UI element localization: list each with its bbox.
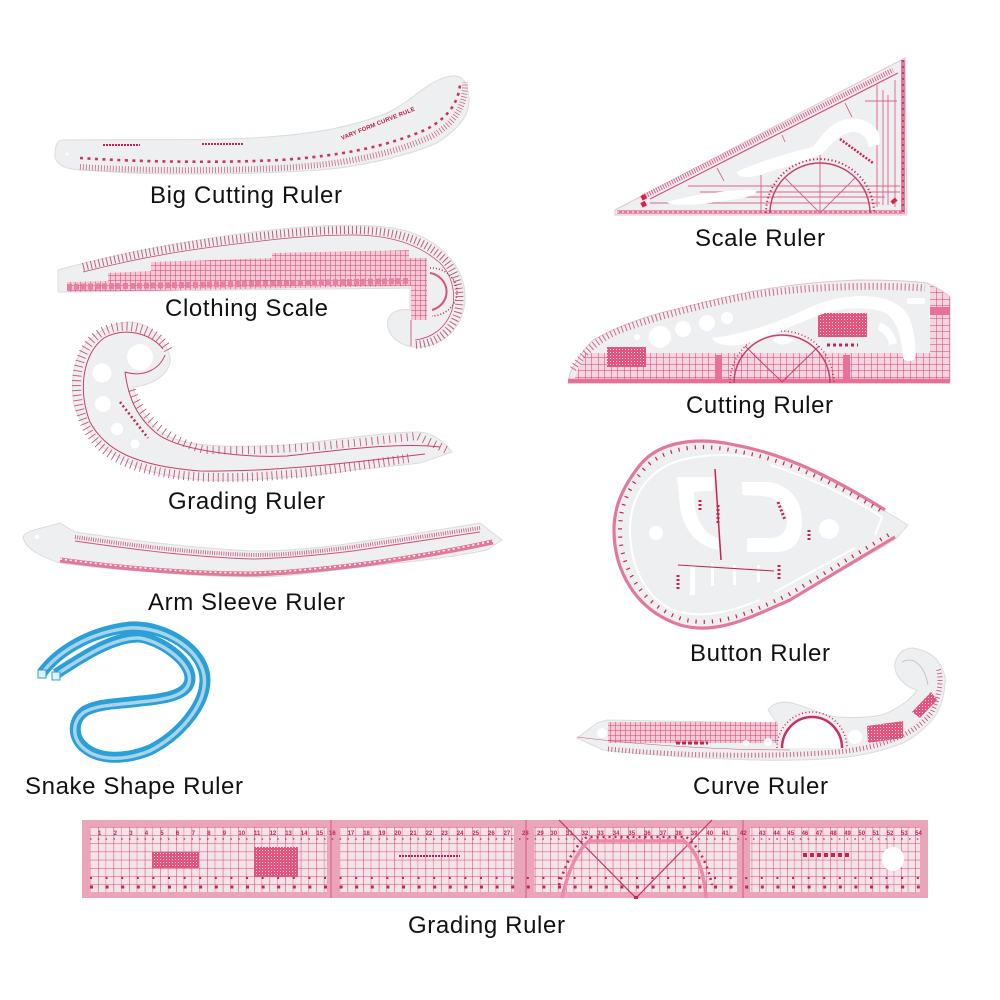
semicircular cut-out bbox=[782, 717, 842, 748]
scale numbers: 44 bbox=[773, 831, 781, 837]
pink blocks bbox=[867, 721, 903, 743]
ruler: big cutting ruler bbox=[55, 76, 469, 174]
label: Curve Ruler: Curve Ruler bbox=[693, 773, 828, 800]
scale numbers: 46 bbox=[802, 831, 809, 837]
ruler: cutting ruler bbox=[568, 280, 950, 383]
scale numbers: 42 bbox=[740, 831, 747, 837]
scale numbers: 49 bbox=[844, 831, 852, 837]
scale numbers: 24 bbox=[457, 831, 464, 837]
scale numbers: 21 bbox=[410, 831, 417, 837]
scale numbers: 10 bbox=[238, 831, 246, 837]
scale numbers: 37 bbox=[660, 831, 667, 837]
scale numbers: 33 bbox=[597, 831, 605, 837]
scale numbers: 6 bbox=[176, 831, 180, 837]
label: Grading Ruler straight: Grading Ruler bbox=[408, 912, 565, 939]
scale numbers: 3 bbox=[129, 831, 133, 837]
label: Clothing Scale: Clothing Scale bbox=[165, 295, 328, 322]
scale numbers: 15 bbox=[316, 831, 324, 837]
scale numbers: 16 bbox=[329, 831, 336, 837]
scale numbers: 7 bbox=[192, 831, 196, 837]
scale numbers: 31 bbox=[566, 831, 573, 837]
scale numbers: 47 bbox=[816, 831, 823, 837]
scale numbers: 40 bbox=[706, 831, 714, 837]
pink blocks and labels bbox=[152, 852, 199, 868]
scale numbers: 2 bbox=[114, 831, 118, 837]
ruler: clothing scale bbox=[58, 225, 465, 347]
scale numbers: 9 bbox=[223, 831, 227, 837]
scale numbers: 11 bbox=[254, 831, 261, 837]
scale numbers: 28 bbox=[522, 831, 529, 837]
pink grid bbox=[608, 722, 778, 743]
label: Scale Ruler: Scale Ruler bbox=[695, 225, 825, 252]
scale numbers: 45 bbox=[787, 831, 795, 837]
scale numbers: 5 bbox=[160, 831, 164, 837]
scale numbers: 52 bbox=[887, 831, 894, 837]
scale numbers: 14 bbox=[301, 831, 308, 837]
ruler: grading ruler curved bbox=[72, 322, 452, 480]
scale numbers: 20 bbox=[394, 831, 402, 837]
scale numbers: 35 bbox=[628, 831, 636, 837]
scale numbers: 25 bbox=[472, 831, 480, 837]
scale numbers: 27 bbox=[504, 831, 511, 837]
scale numbers: 50 bbox=[858, 831, 866, 837]
scale numbers: 23 bbox=[441, 831, 449, 837]
scale numbers: 29 bbox=[537, 831, 544, 837]
cut-out slots bbox=[737, 118, 880, 177]
scale numbers: 39 bbox=[691, 831, 698, 837]
label: Snake Shape Ruler: Snake Shape Ruler bbox=[25, 773, 243, 800]
scale numbers: 22 bbox=[426, 831, 433, 837]
scale numbers: 13 bbox=[285, 831, 293, 837]
ruler: curve ruler bbox=[577, 648, 945, 760]
pink blocks bbox=[818, 313, 867, 337]
scale numbers: 53 bbox=[901, 831, 908, 837]
label: Grading Ruler curved: Grading Ruler bbox=[168, 488, 325, 515]
ruler: arm sleeve ruler bbox=[23, 523, 502, 577]
label: Big Cutting Ruler: Big Cutting Ruler bbox=[150, 182, 342, 209]
scale numbers: 54 bbox=[915, 831, 923, 837]
label: Button Ruler: Button Ruler bbox=[690, 640, 830, 667]
cut-out slots and holes bbox=[712, 296, 915, 361]
scale numbers: 26 bbox=[488, 831, 495, 837]
scale numbers: 34 bbox=[613, 831, 620, 837]
hanging hole bbox=[882, 847, 904, 871]
protractor arc bbox=[559, 820, 712, 898]
scale numbers: 38 bbox=[675, 831, 683, 837]
scale numbers: 19 bbox=[379, 831, 386, 837]
ruler: big cutting ruler: VARY FORM CURVE RULE bbox=[341, 107, 416, 142]
scale numbers: 18 bbox=[363, 831, 371, 837]
scale numbers: 43 bbox=[759, 831, 766, 837]
ruler: flexible blue snake ruler bbox=[38, 627, 205, 758]
scale numbers: 30 bbox=[550, 831, 558, 837]
D-shaped cut-outs bbox=[677, 477, 719, 550]
scale numbers: 12 bbox=[270, 831, 277, 837]
scale numbers: 51 bbox=[873, 831, 880, 837]
grid band bbox=[574, 284, 950, 383]
scale numbers: 32 bbox=[582, 831, 589, 837]
punched holes bbox=[92, 344, 153, 448]
scale numbers: 36 bbox=[644, 831, 651, 837]
white inner slots bbox=[630, 455, 882, 614]
ruler: triangular scale ruler bbox=[615, 58, 907, 215]
scale numbers: 1 bbox=[98, 831, 102, 837]
scale numbers: 8 bbox=[207, 831, 211, 837]
scale numbers: 41 bbox=[722, 831, 729, 837]
ruler: teardrop button ruler bbox=[613, 441, 908, 628]
label: Arm Sleeve Ruler: Arm Sleeve Ruler bbox=[148, 589, 345, 616]
pink grid bbox=[67, 250, 427, 320]
scale numbers: 48 bbox=[830, 831, 837, 837]
scale numbers: 17 bbox=[348, 831, 355, 837]
ruler: long straight grading ruler bbox=[82, 820, 928, 899]
label: Cutting Ruler: Cutting Ruler bbox=[686, 392, 833, 419]
scale numbers: 4 bbox=[145, 831, 149, 837]
